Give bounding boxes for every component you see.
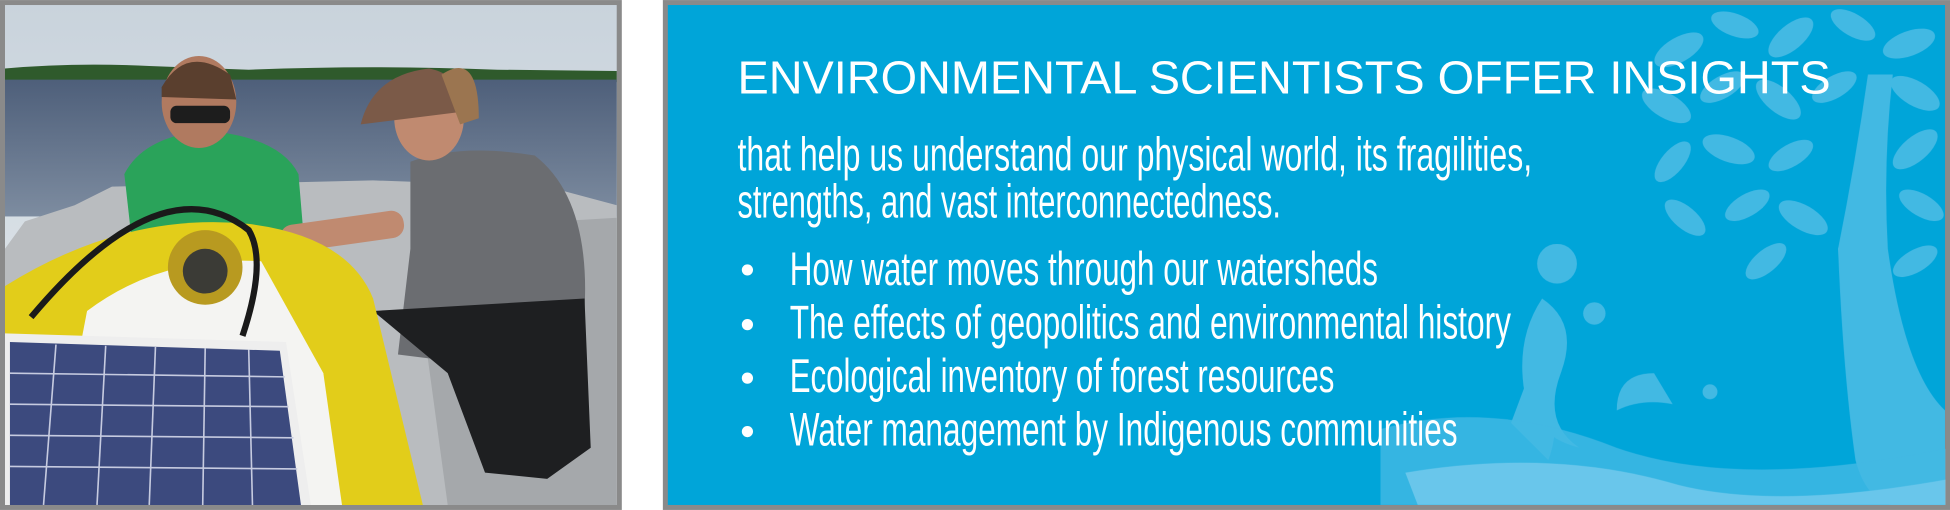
bullet list: Ecological inventory of forest resources <box>790 350 1334 403</box>
subtitle: strengths, and vast interconnectedness. <box>737 176 1281 229</box>
solar panel <box>5 333 82 505</box>
woman <box>398 151 585 373</box>
panel: photo <box>0 0 622 510</box>
subtitle: that help us understand our physical world, its fragilities, <box>737 128 1532 181</box>
bullet list: The effects of geopolitics and environmental history <box>790 296 1511 349</box>
man green shirt <box>124 133 302 232</box>
icon: tree and water splash decoration <box>1380 3 1950 505</box>
bullet list: Water management by Indigenous communities <box>790 403 1458 456</box>
subtitle <box>737 128 1532 229</box>
panel: info box <box>663 0 1950 510</box>
title: ENVIRONMENTAL SCIENTISTS OFFER INSIGHTS <box>737 51 1831 103</box>
bullet list <box>742 243 1511 456</box>
buoy <box>5 222 423 505</box>
bullet list: How water moves through our watersheds <box>790 243 1378 296</box>
